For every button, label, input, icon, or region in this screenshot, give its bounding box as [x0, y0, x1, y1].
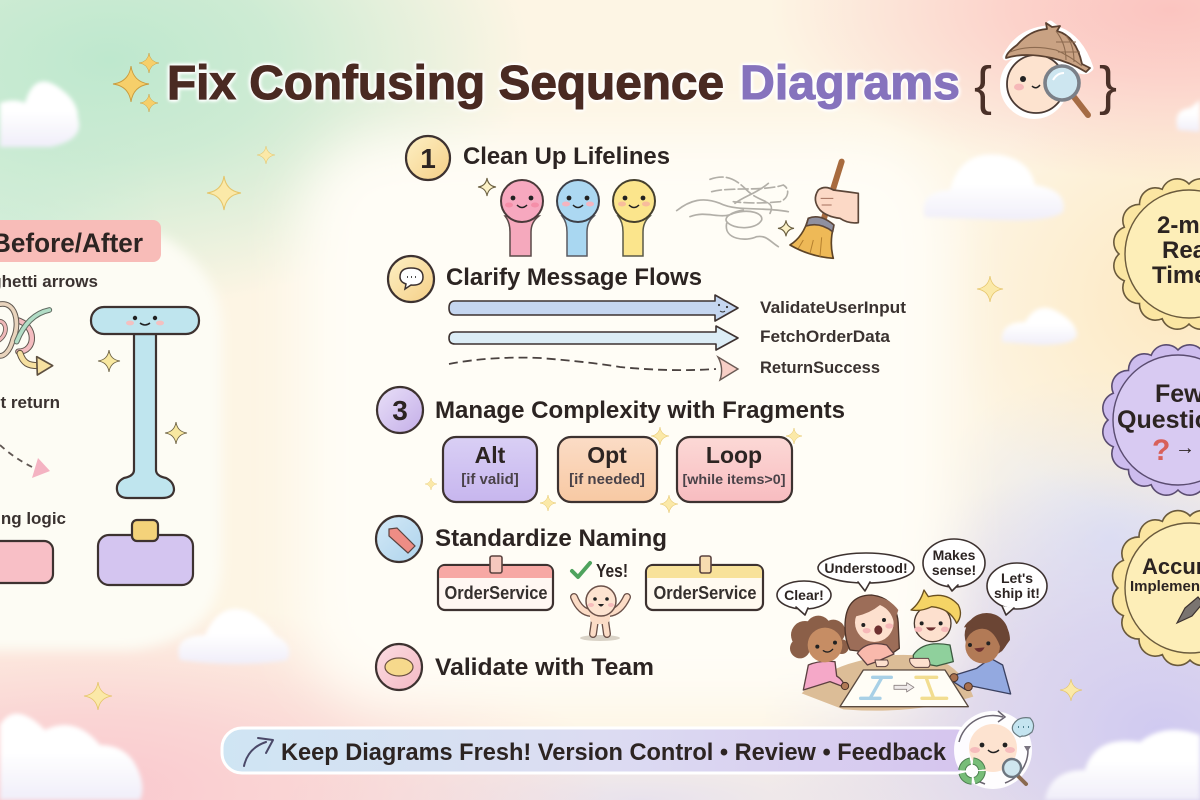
speech bubble: makes sense: [923, 539, 985, 591]
blue lifeline: [557, 180, 599, 256]
number badge 1: [406, 136, 450, 180]
step 5: validate with team: [376, 644, 654, 690]
number badge 1: 1: [420, 143, 436, 174]
fragment: alt: Alt: [475, 442, 506, 468]
speech bubble: clear: [777, 581, 831, 615]
badge: fewer questions: [1103, 345, 1200, 495]
title: [113, 23, 1117, 116]
heading: clean up lifelines: Clean Up Lifelines: [463, 143, 670, 170]
fragment: loop: [while items>0]: [682, 471, 786, 487]
icon: dashed return arrow: [0, 445, 50, 478]
step 4: standardize naming: [376, 516, 763, 641]
central cream panel: [300, 135, 950, 705]
badge: accurate implementation: [1113, 511, 1200, 665]
before/after tag: [0, 220, 161, 262]
check mark and yes: [572, 561, 628, 581]
sparkles: scattered gold: [84, 146, 1082, 710]
speech bubble: let's ship it: Let's: [1001, 570, 1033, 586]
icon: tangled arrows: [0, 304, 53, 375]
heading text: Fix Confusing Sequence: [167, 57, 724, 110]
speech bubble: let's ship it: ship it!: [994, 585, 1040, 601]
step 2: clarify message flows: [388, 256, 906, 380]
child 2: [845, 595, 899, 667]
icon: tag badge: [376, 516, 422, 562]
icon: detective character: [1003, 23, 1090, 116]
people and table: [790, 590, 1011, 711]
sparkles: title: [113, 53, 159, 112]
icon: chat badge: [388, 256, 434, 302]
fragment: opt: [558, 437, 657, 502]
child 4: [950, 613, 1011, 694]
arrow: validate user input: [449, 295, 906, 321]
sparkles near lifeline: [98, 350, 187, 444]
fragment: opt: [if needed]: [569, 471, 645, 488]
pink fragment box: [0, 541, 53, 583]
badge: 2-min read time: [1114, 179, 1200, 329]
arrow: return success dashed: [449, 357, 880, 380]
speech bubble: understood: Understood!: [824, 560, 908, 576]
step 3: manage complexity with fragments: [377, 387, 845, 502]
sparkle: [478, 178, 496, 196]
speech bubble: let's ship it: [987, 563, 1047, 615]
icon: pen: [1177, 597, 1200, 623]
purple fragment box with tab: [98, 520, 193, 585]
left brace: {: [974, 56, 992, 116]
fragment: opt: Opt: [587, 442, 627, 468]
badge: fewer questions: →: [1175, 437, 1195, 459]
dusty tangled lines: [677, 177, 788, 247]
number badge 3: [377, 387, 423, 433]
icon: review mascot: [954, 711, 1034, 789]
footer banner: [222, 711, 1034, 789]
banner text: Keep Diagrams Fresh! Version Control • Review • Feedback: [281, 739, 947, 766]
speech bubble: clear: Clear!: [784, 587, 824, 603]
badge: fewer questions: ?: [1152, 434, 1170, 467]
heading: standardize naming: Standardize Naming: [435, 525, 667, 552]
icon: swoosh arrow: [244, 738, 273, 766]
number badge 3: 3: [392, 395, 408, 426]
fragment: alt: [if valid]: [461, 471, 519, 488]
pink lifeline: [501, 180, 543, 256]
fragment: loop: Loop: [706, 442, 762, 468]
name card: yellow: OrderService: [654, 583, 756, 603]
clean lifeline character: [91, 307, 199, 498]
fragment: loop: [677, 437, 792, 502]
heading: manage complexity: Manage Complexity with Fragments: [435, 397, 845, 424]
arrow: return success dashed: ReturnSuccess: [760, 358, 880, 377]
yellow lifeline: [613, 180, 655, 256]
check mark and yes: Yes!: [596, 561, 628, 581]
name card: red: OrderService: [444, 583, 548, 603]
arrow: validate user input: ValidateUserInput: [760, 298, 906, 317]
speech bubble: makes sense: Makes: [933, 547, 976, 563]
heading text: Diagrams: [740, 57, 960, 110]
child 1: [790, 616, 849, 690]
fragment: alt: [443, 437, 537, 502]
icon: handshake badge: [376, 644, 422, 690]
right brace: }: [1099, 56, 1117, 116]
step 1: clean up lifelines: [406, 136, 858, 258]
cheering character: [574, 586, 627, 641]
arrow: fetch order data: FetchOrderData: [760, 327, 891, 346]
team illustration: [777, 539, 1047, 711]
icon: hand with broom: [778, 162, 858, 258]
name card: red: [438, 556, 553, 610]
heading: validate with team: Validate with Team: [435, 654, 654, 681]
speech bubble: understood: [818, 553, 914, 591]
speech bubble: makes sense: sense!: [932, 562, 976, 578]
arrow: fetch order data: [449, 326, 891, 350]
heading: clarify message flows: Clarify Message Flows: [446, 264, 702, 291]
table: [802, 655, 973, 711]
diagram sheet: [840, 670, 968, 707]
name card: yellow: [646, 556, 763, 610]
child 3: [910, 590, 960, 667]
left panel: before/after: [0, 220, 222, 650]
